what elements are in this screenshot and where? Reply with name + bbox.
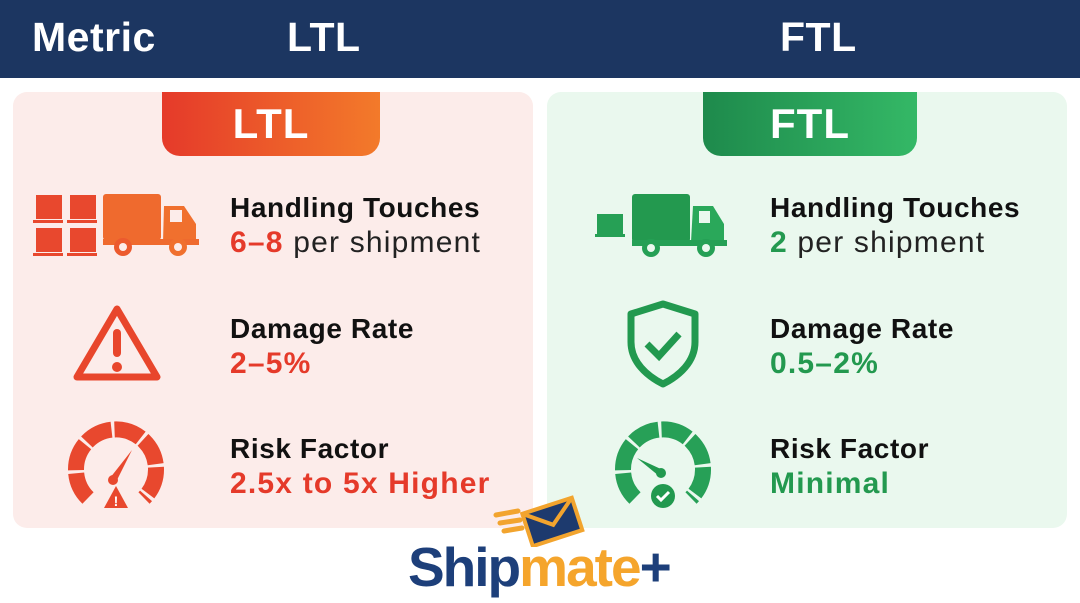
icon: LTL boxes and truck	[33, 194, 199, 256]
text: LTL risk: 2.5x to 5x Higher	[230, 467, 490, 500]
tab: LTL: LTL	[233, 100, 309, 147]
text: FTL risk: Minimal	[770, 467, 890, 500]
text: FTL handling	[770, 192, 1020, 259]
header bar: Metric	[32, 14, 156, 60]
icon: LTL gauge	[68, 421, 164, 509]
text: FTL risk: Risk Factor	[770, 433, 929, 464]
text: LTL handling: Handling Touches	[230, 192, 480, 223]
logo: Shipmate+: Shipmate+	[408, 536, 670, 598]
icon: shield check	[628, 300, 698, 388]
tab: FTL: FTL	[770, 100, 850, 147]
text: LTL handling: 6–8 per shipment	[230, 226, 481, 259]
header bar	[0, 0, 1080, 78]
tab: LTL	[162, 92, 380, 156]
logo: Shipmate+	[408, 495, 670, 598]
header bar: LTL	[287, 14, 361, 60]
icon: envelope	[494, 495, 585, 547]
text: LTL handling	[230, 192, 481, 259]
text: FTL risk	[770, 433, 929, 500]
text: LTL damage: Damage Rate	[230, 313, 414, 344]
text: FTL handling: Handling Touches	[770, 192, 1020, 223]
text: FTL damage	[770, 313, 954, 380]
icon: FTL gauge	[615, 421, 711, 508]
icon: warning triangle	[74, 306, 160, 380]
panel: LTL	[13, 92, 533, 528]
tab: FTL	[703, 92, 917, 156]
text: LTL damage	[230, 313, 414, 380]
header bar: FTL	[780, 14, 857, 60]
text: LTL risk	[230, 433, 490, 500]
text: FTL damage: Damage Rate	[770, 313, 954, 344]
icon: FTL truck	[595, 194, 727, 257]
panel: FTL	[547, 92, 1067, 528]
text: FTL damage: 0.5–2%	[770, 347, 879, 380]
text: LTL risk: Risk Factor	[230, 433, 389, 464]
icon: LTL gauge: !	[114, 493, 118, 509]
text: FTL handling: 2 per shipment	[770, 226, 985, 259]
text: LTL damage: 2–5%	[230, 347, 312, 380]
